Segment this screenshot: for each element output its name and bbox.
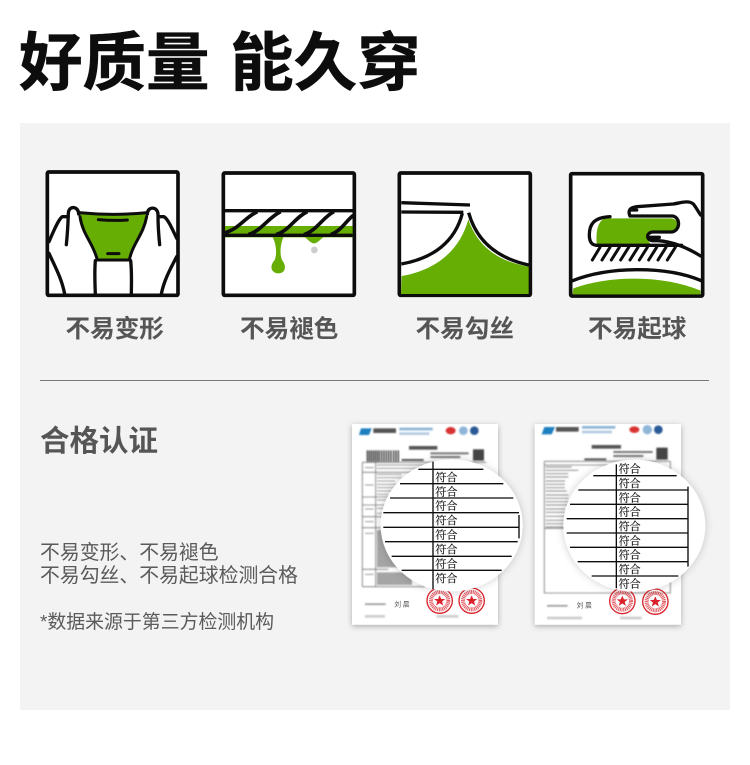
magnifier: second report pass results: 符合: [619, 562, 641, 576]
icon: hard to fade: [223, 173, 354, 295]
panel: quality background: [20, 123, 730, 710]
label: hard to deform: 不易变形: [66, 315, 164, 343]
magnifier: first report pass results: 符合: [435, 484, 457, 498]
magnifier: second report pass results: 符合: [619, 490, 641, 504]
icon: hard to snag: [399, 173, 530, 295]
magnifier: first report pass results: 符合: [435, 513, 457, 527]
magnifier: second report pass results: [563, 460, 705, 592]
magnifier: second report pass results: 符合: [619, 576, 641, 590]
magnifier: first report pass results: [381, 459, 523, 591]
magnifier: second report pass results: 符合: [619, 533, 641, 547]
icon: hard to deform: [47, 172, 178, 295]
heading: certification: 合格认证: [40, 425, 158, 458]
label: hard to pill: 不易起球: [588, 315, 687, 343]
text block: certification detail: 不易勾丝、不易起球检测合格: [40, 565, 298, 587]
magnifier: first report pass results: 符合: [435, 542, 457, 556]
title: 好质量 能久穿: [19, 29, 421, 99]
text block: certification detail: 不易变形、不易褪色: [40, 542, 219, 564]
report: second test certificate: 刘 晨: [577, 600, 592, 609]
magnifier: second report pass results: 符合: [619, 461, 641, 475]
magnifier: second report pass results: 符合: [619, 548, 641, 562]
magnifier: first report pass results: 符合: [435, 528, 457, 542]
magnifier: second report pass results: 符合: [619, 505, 641, 519]
magnifier: first report pass results: 符合: [435, 499, 457, 513]
magnifier: second report pass results: 符合: [619, 519, 641, 533]
report: first test certificate: 刘 晨: [394, 599, 410, 608]
label: hard to snag: 不易勾丝: [416, 315, 514, 343]
report: second test certificate: [535, 424, 705, 625]
magnifier: first report pass results: 符合: [435, 470, 457, 484]
icon: hard to pill: [571, 174, 703, 296]
footnote: data source: *数据来源于第三方检测机构: [40, 611, 274, 633]
magnifier: first report pass results: 符合: [435, 571, 457, 585]
report: first test certificate: [352, 424, 523, 625]
magnifier: second report pass results: 符合: [619, 476, 641, 490]
magnifier: first report pass results: 符合: [435, 556, 457, 570]
text block: certification detail: [40, 542, 298, 587]
label: hard to fade: 不易褪色: [240, 315, 338, 343]
